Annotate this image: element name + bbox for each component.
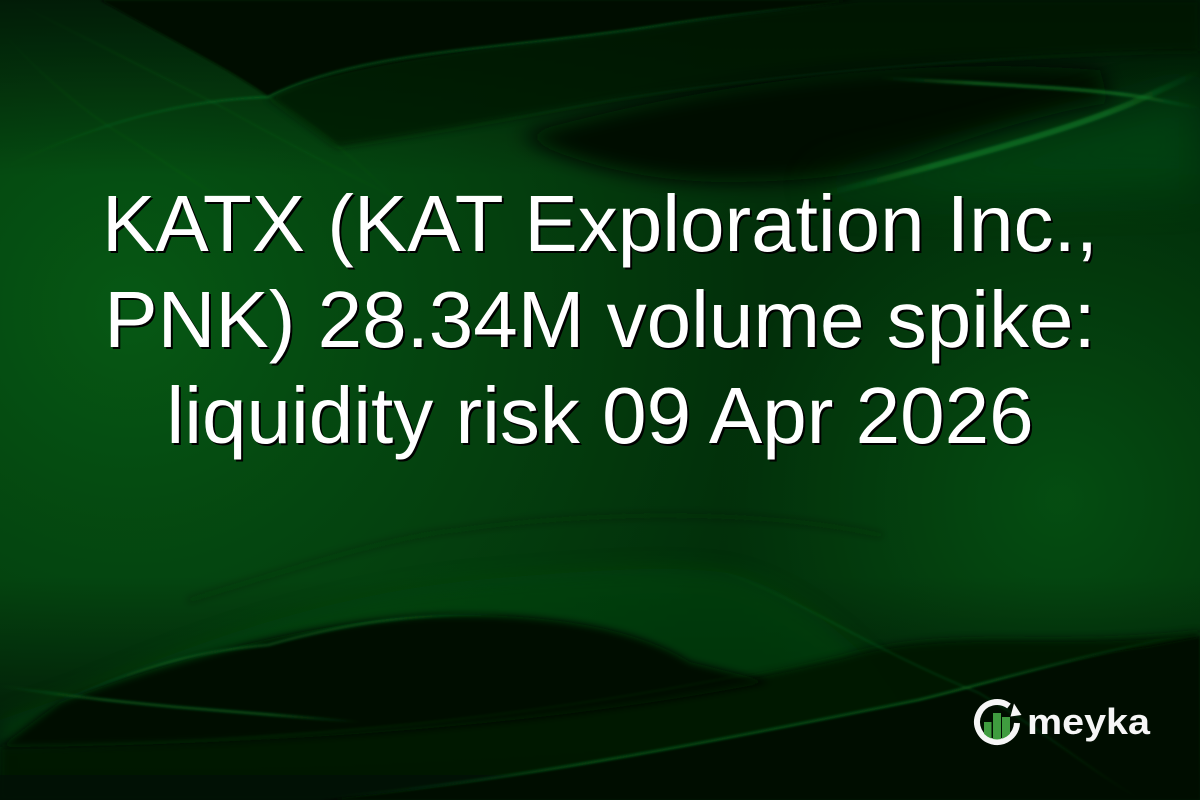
title: PNK) 28.34M volume spike: [104, 275, 1096, 364]
title: liquidity risk 09 Apr 2026 [166, 371, 1034, 460]
icon: ring with arrow and green bars [977, 702, 1022, 742]
logo: meyka [974, 699, 1151, 746]
bottom wave band [0, 569, 1200, 800]
wordmark: meyka [1027, 701, 1151, 742]
title [102, 179, 1098, 462]
title: KATX (KAT Exploration Inc., [102, 179, 1098, 268]
top wave band [100, 0, 1200, 194]
